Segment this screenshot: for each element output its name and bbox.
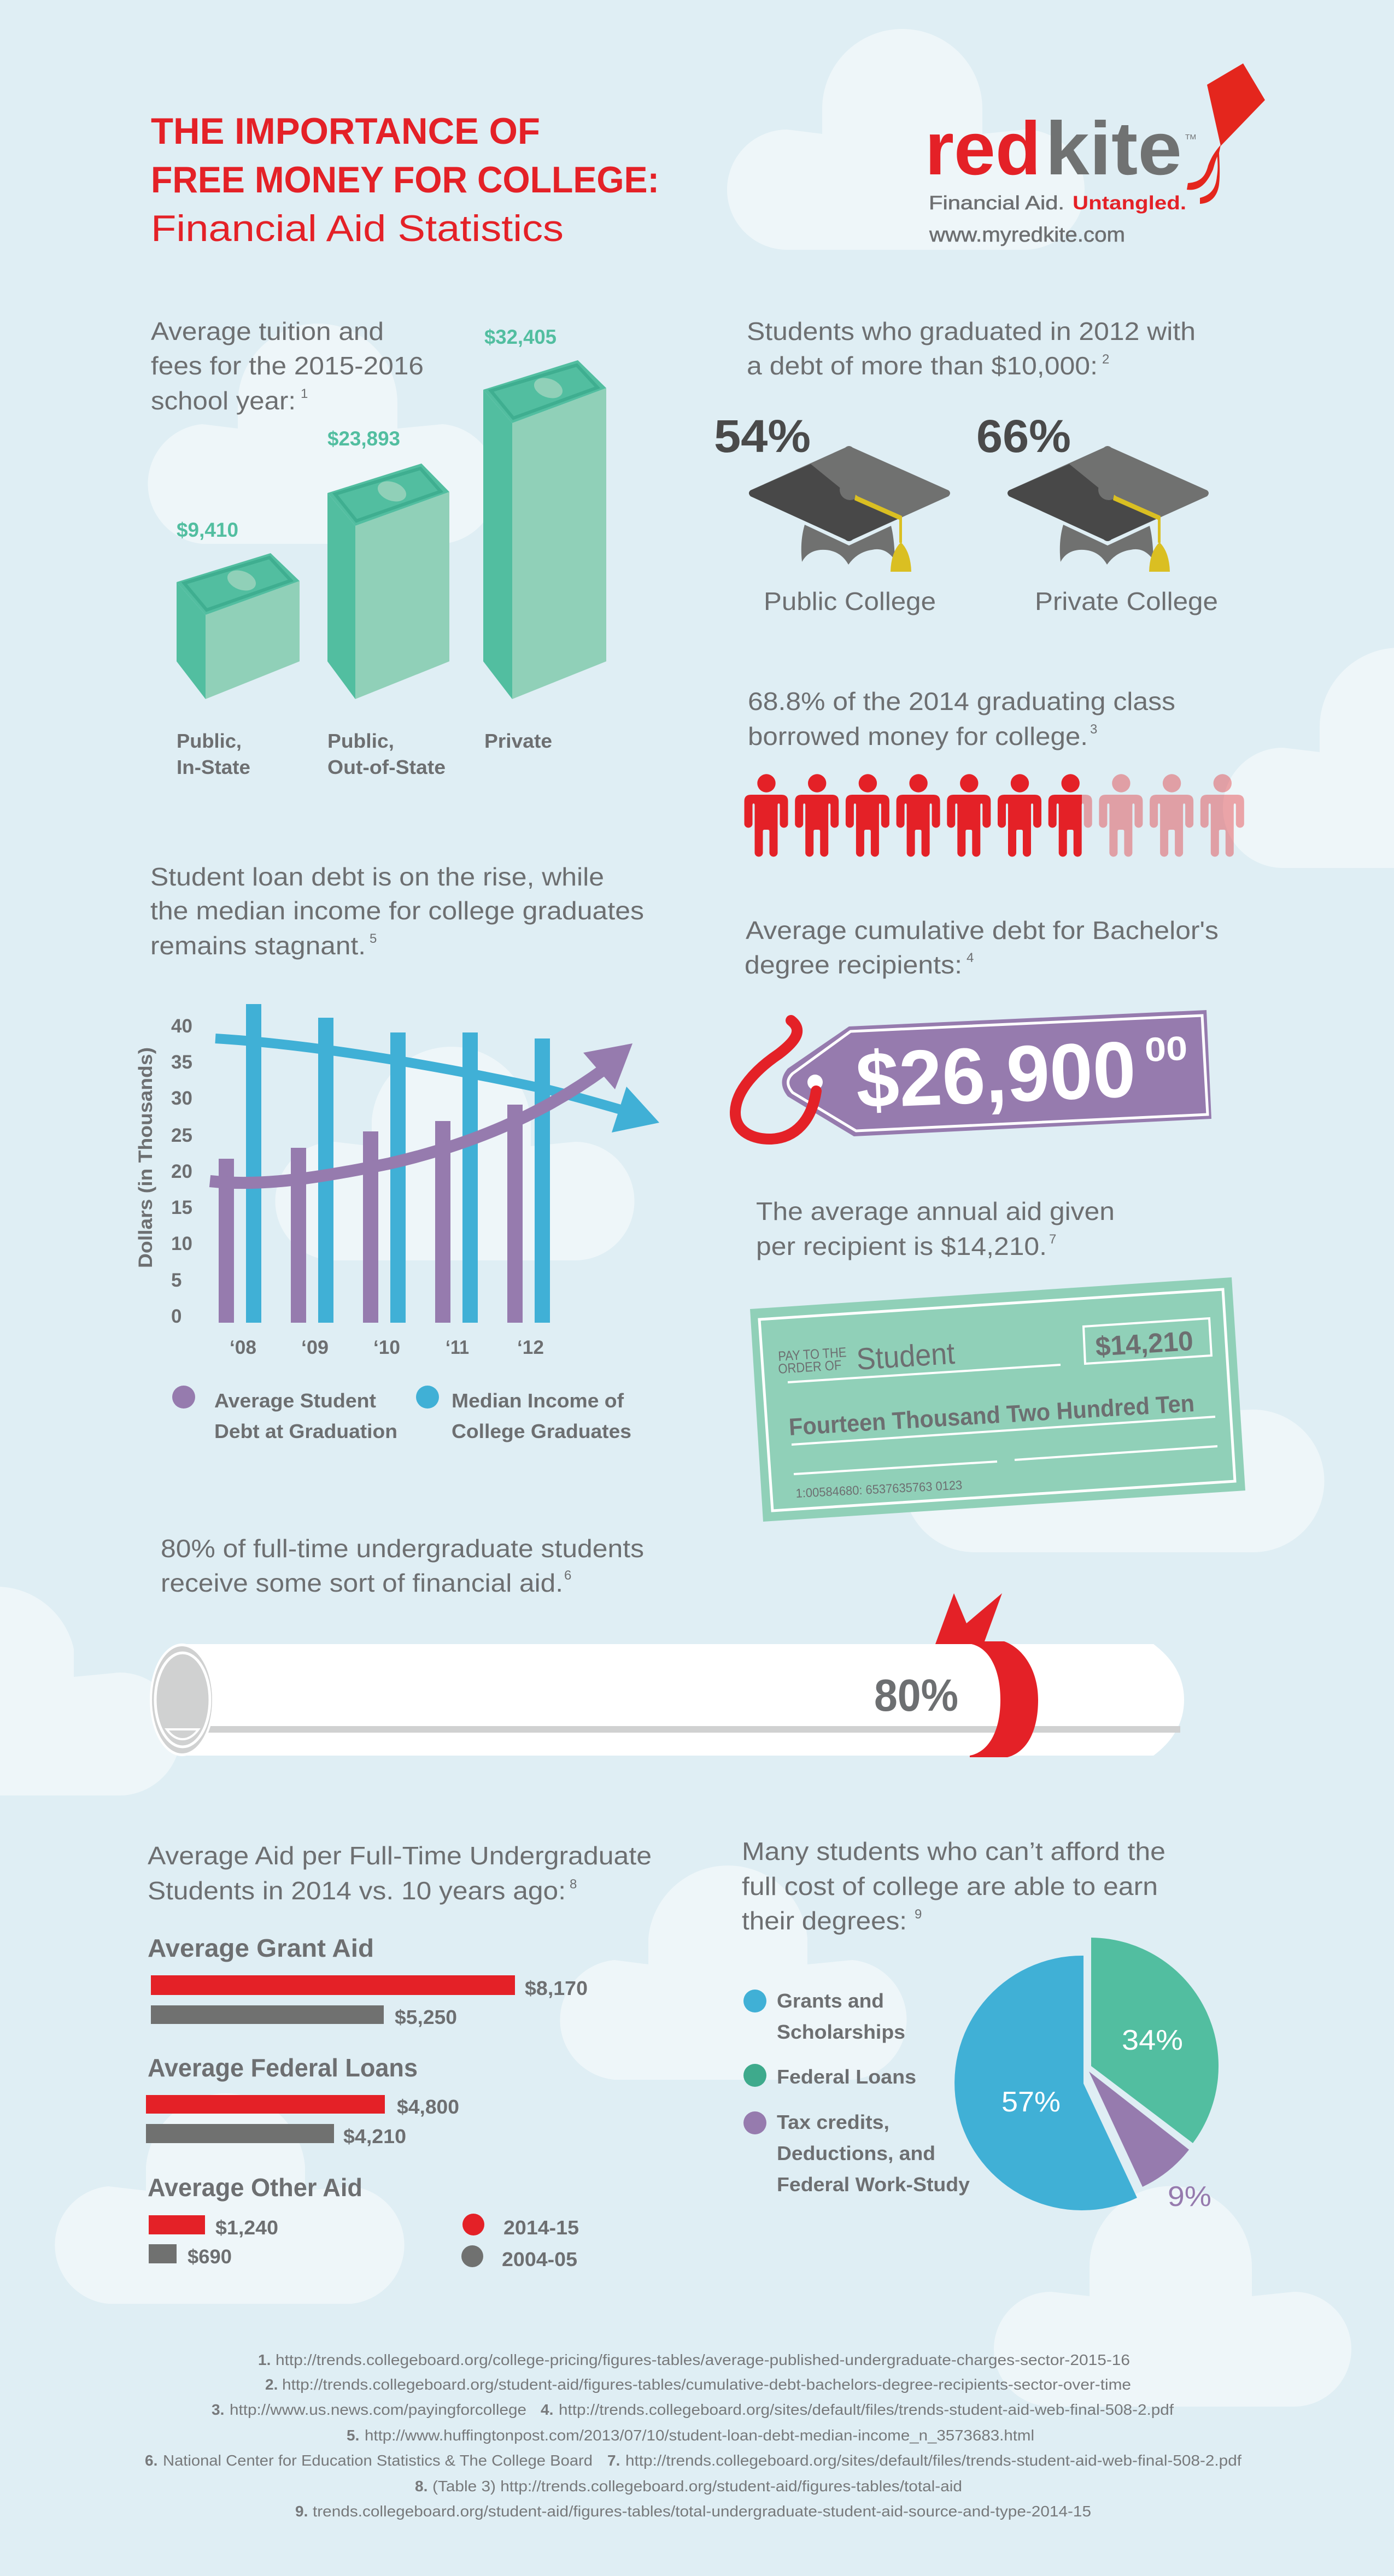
y axis labels: 0 [171, 1306, 181, 1327]
pie chart: 57% [1001, 2086, 1061, 2118]
heading: average aid: Average Aid per Full-Time Undergraduate [148, 1841, 652, 1870]
bar: private: $32,405 [484, 326, 557, 348]
heading: average tuition: 1 [301, 386, 308, 401]
legend: pie: Grants and [777, 1990, 884, 2012]
footnotes: National Center for Education Statistics & The College Board [163, 2452, 593, 2469]
footnotes: 8. [415, 2478, 427, 2495]
heading: many students: their degrees: [742, 1906, 907, 1935]
legend: years: 2004-05 [502, 2248, 577, 2270]
heading: cumulative debt: 4 [967, 950, 974, 965]
diploma progress bar [150, 1593, 1184, 1757]
heading: many students: 9 [915, 1907, 922, 1922]
legend: chart: Average Student [214, 1389, 376, 1412]
x axis labels: ‘12 [517, 1337, 544, 1358]
icon: graduation cap public college [714, 410, 950, 615]
footnotes: http://trends.collegeboard.org/student-aid/figures-tables/cumulative-debt-bachelors-degree-recipients-sector-over-time [282, 2376, 1131, 2393]
legend: years [461, 2214, 579, 2270]
legend: pie: Tax credits, [777, 2111, 889, 2133]
heading: loan debt rising: remains stagnant. [150, 931, 366, 960]
heading: annual aid [756, 1197, 1115, 1260]
legend: chart: Median Income of [452, 1389, 624, 1412]
bar chart: debt vs income [135, 1004, 659, 1358]
bar group: federal loans: $4,800 [397, 2096, 459, 2118]
y axis title: Dollars (in Thousands) [135, 1047, 156, 1268]
footnotes: http://trends.collegeboard.org/sites/default/files/trends-student-aid-web-final-508-2.pdf [559, 2401, 1174, 2418]
heading: average tuition: fees for the 2015-2016 [151, 351, 424, 380]
legend: pie: Scholarships [777, 2021, 905, 2043]
y axis labels: 40 [171, 1016, 192, 1037]
legend: years: 2014-15 [503, 2216, 579, 2239]
bar: private [483, 326, 606, 752]
bar: public out-of-state: $23,893 [327, 427, 400, 450]
bar: public in-state: Public, [177, 730, 242, 752]
bars: student debt [219, 1105, 523, 1323]
bar group: grant aid: $5,250 [395, 2006, 457, 2028]
heading: graduates with debt: 2 [1102, 352, 1109, 367]
heading: 80 percent: receive some sort of financial aid. [161, 1569, 563, 1597]
y axis labels [171, 1016, 192, 1327]
check: Fourteen Thousand Two Hundred Ten [788, 1390, 1195, 1441]
title [151, 110, 659, 249]
pie chart: 34% [1122, 2025, 1183, 2056]
bar: public in-state [177, 519, 300, 778]
y axis labels: 10 [171, 1233, 192, 1254]
heading: many students: Many students who can’t afford the [742, 1837, 1165, 1865]
check [750, 1277, 1245, 1522]
logo: redkite: Untangled. [1073, 192, 1186, 214]
heading: 68.8 percent borrowed: 68.8% of the 2014 graduating class [748, 687, 1175, 715]
legend: pie [743, 1990, 970, 2196]
footnotes: (Table 3) http://trends.collegeboard.org/student-aid/figures-tables/total-aid [432, 2478, 962, 2495]
icon: graduation cap private college [976, 410, 1218, 615]
logo: redkite: www.myredkite.com [929, 224, 1125, 247]
heading: average tuition: school year: [151, 386, 296, 415]
heading: annual aid: 7 [1049, 1232, 1056, 1247]
price tag: 00 [1144, 1030, 1188, 1069]
y axis labels: 25 [171, 1125, 192, 1146]
heading: loan debt rising: 5 [370, 931, 377, 946]
heading: graduates with debt: a debt of more than $10,000: [747, 351, 1098, 380]
footnotes: 4. [541, 2401, 553, 2418]
diploma progress bar: 80% [874, 1670, 958, 1721]
bar group: other aid: Average Other Aid [148, 2173, 362, 2202]
arrow: debt trend [210, 1043, 632, 1183]
check: ORDER OF [778, 1358, 842, 1377]
footnotes: 2. [265, 2376, 278, 2393]
bar group: grant aid: Average Grant Aid [148, 1934, 374, 1962]
bar group: grant aid: $8,170 [525, 1977, 588, 1999]
bar: public out-of-state: Public, [327, 730, 394, 752]
legend: pie: Deductions, and [777, 2142, 935, 2164]
logo: redkite [925, 63, 1265, 247]
bar group: other aid: $1,240 [215, 2216, 278, 2239]
heading: 68.8 percent borrowed: borrowed money for college. [748, 722, 1088, 750]
bar group: grant aid [148, 1934, 588, 2028]
heading: average tuition [151, 317, 424, 415]
check: $14,210 [1094, 1325, 1194, 1362]
heading: loan debt rising [150, 862, 644, 960]
footnotes: http://www.huffingtonpost.com/2013/07/10/student-loan-debt-median-income_n_3573683.html [365, 2427, 1034, 2444]
legend: pie: Federal Work-Study [777, 2173, 970, 2196]
footnotes: 7. [607, 2452, 620, 2469]
logo: redkite: kite [1045, 107, 1182, 191]
bar: public in-state: $9,410 [177, 519, 238, 541]
heading: 80 percent [161, 1534, 644, 1597]
footnotes: trends.collegeboard.org/student-aid/figures-tables/total-undergraduate-student-aid-source-and-type-2014-15 [313, 2503, 1091, 2520]
pie chart: 9% [1168, 2181, 1211, 2213]
heading: many students [742, 1837, 1165, 1935]
check: Student [856, 1336, 956, 1376]
icon: graduation cap private college: 66% [976, 410, 1071, 462]
check: 1:00584680: 6537635763 0123 [795, 1478, 963, 1500]
heading: loan debt rising: the median income for college graduates [150, 896, 644, 925]
footnotes [145, 2351, 1241, 2520]
bar group: federal loans: Average Federal Loans [148, 2053, 418, 2082]
heading: 68.8 percent borrowed [748, 687, 1175, 750]
ribbon [935, 1593, 1038, 1757]
bar group: federal loans: $4,210 [343, 2125, 406, 2147]
legend: chart [172, 1386, 631, 1442]
footnotes: 5. [347, 2427, 359, 2444]
bar: private: Private [484, 730, 552, 752]
heading: 80 percent: 6 [564, 1568, 571, 1583]
icon: graduation cap private college: Private College [1035, 587, 1218, 615]
title: Financial Aid Statistics [151, 208, 564, 249]
heading: average aid: Students in 2014 vs. 10 years ago: [148, 1876, 566, 1905]
heading: graduates with debt: Students who graduated in 2012 with [747, 317, 1196, 345]
y axis labels: 15 [171, 1197, 192, 1218]
footnotes: http://trends.collegeboard.org/college-pricing/figures-tables/average-published-undergraduate-charges-sector-2015-16 [276, 2351, 1130, 2368]
heading: graduates with debt [747, 317, 1196, 380]
bar group: federal loans [146, 2053, 459, 2147]
title: FREE MONEY FOR COLLEGE: [151, 159, 659, 201]
heading: average aid: 8 [570, 1877, 577, 1892]
x axis labels: ‘09 [301, 1337, 329, 1358]
footnotes: 6. [145, 2452, 157, 2469]
heading: cumulative debt [745, 916, 1219, 979]
bar: public out-of-state [327, 427, 449, 778]
price tag [735, 1010, 1211, 1139]
check: PAY TO THE [778, 1345, 847, 1364]
logo: redkite: red [925, 107, 1041, 191]
x axis labels [230, 1337, 544, 1358]
icon: kite [1187, 63, 1265, 204]
bar: public out-of-state: Out-of-State [327, 756, 446, 778]
y axis labels: 30 [171, 1088, 192, 1109]
footnotes: http://trends.collegeboard.org/sites/default/files/trends-student-aid-web-final-508-2.pdf [625, 2452, 1241, 2469]
pie chart [954, 1938, 1219, 2213]
logo: redkite: TM [1185, 133, 1196, 141]
bars: median income [246, 1004, 550, 1323]
icon: graduation cap public college: 54% [714, 410, 811, 462]
legend: chart: Debt at Graduation [214, 1420, 397, 1442]
bar chart: tuition money stacks [177, 326, 606, 778]
price tag: $26,900 [854, 1025, 1138, 1125]
bar: public in-state: In-State [177, 756, 250, 778]
footnotes: http://www.us.news.com/payingforcollege [230, 2401, 526, 2418]
footnotes: 1. [258, 2351, 271, 2368]
arrow: income trend [215, 1038, 659, 1132]
x axis labels: ‘08 [230, 1337, 256, 1358]
y axis labels: 35 [171, 1052, 192, 1073]
heading: many students: full cost of college are able to earn [742, 1872, 1158, 1900]
heading: 80 percent: 80% of full-time undergraduate students [161, 1534, 644, 1563]
y axis labels: 5 [171, 1270, 181, 1291]
bar group: other aid: $690 [188, 2245, 232, 2268]
heading: 68.8 percent borrowed: 3 [1090, 722, 1097, 737]
heading: average tuition: Average tuition and [151, 317, 384, 345]
logo: redkite: Financial Aid. [929, 192, 1064, 214]
icon: graduation cap public college: Public College [764, 587, 936, 615]
heading: average aid [148, 1841, 652, 1905]
x axis labels: ‘11 [446, 1337, 469, 1358]
legend: chart: College Graduates [452, 1420, 631, 1442]
heading: annual aid: per recipient is $14,210. [756, 1232, 1047, 1260]
footnotes: 9. [295, 2503, 308, 2520]
bar group: other aid [148, 2173, 362, 2268]
heading: annual aid: The average annual aid given [756, 1197, 1115, 1225]
y axis labels: 20 [171, 1161, 192, 1182]
heading: cumulative debt: Average cumulative debt for Bachelor's [746, 916, 1219, 944]
title: THE IMPORTANCE OF [151, 110, 540, 152]
heading: cumulative debt: degree recipients: [745, 950, 962, 979]
icon row: people 68.8 percent [745, 774, 1244, 857]
footnotes: 3. [212, 2401, 224, 2418]
legend: pie: Federal Loans [777, 2066, 916, 2088]
heading: loan debt rising: Student loan debt is on the rise, while [150, 862, 604, 891]
x axis labels: ‘10 [373, 1337, 400, 1358]
